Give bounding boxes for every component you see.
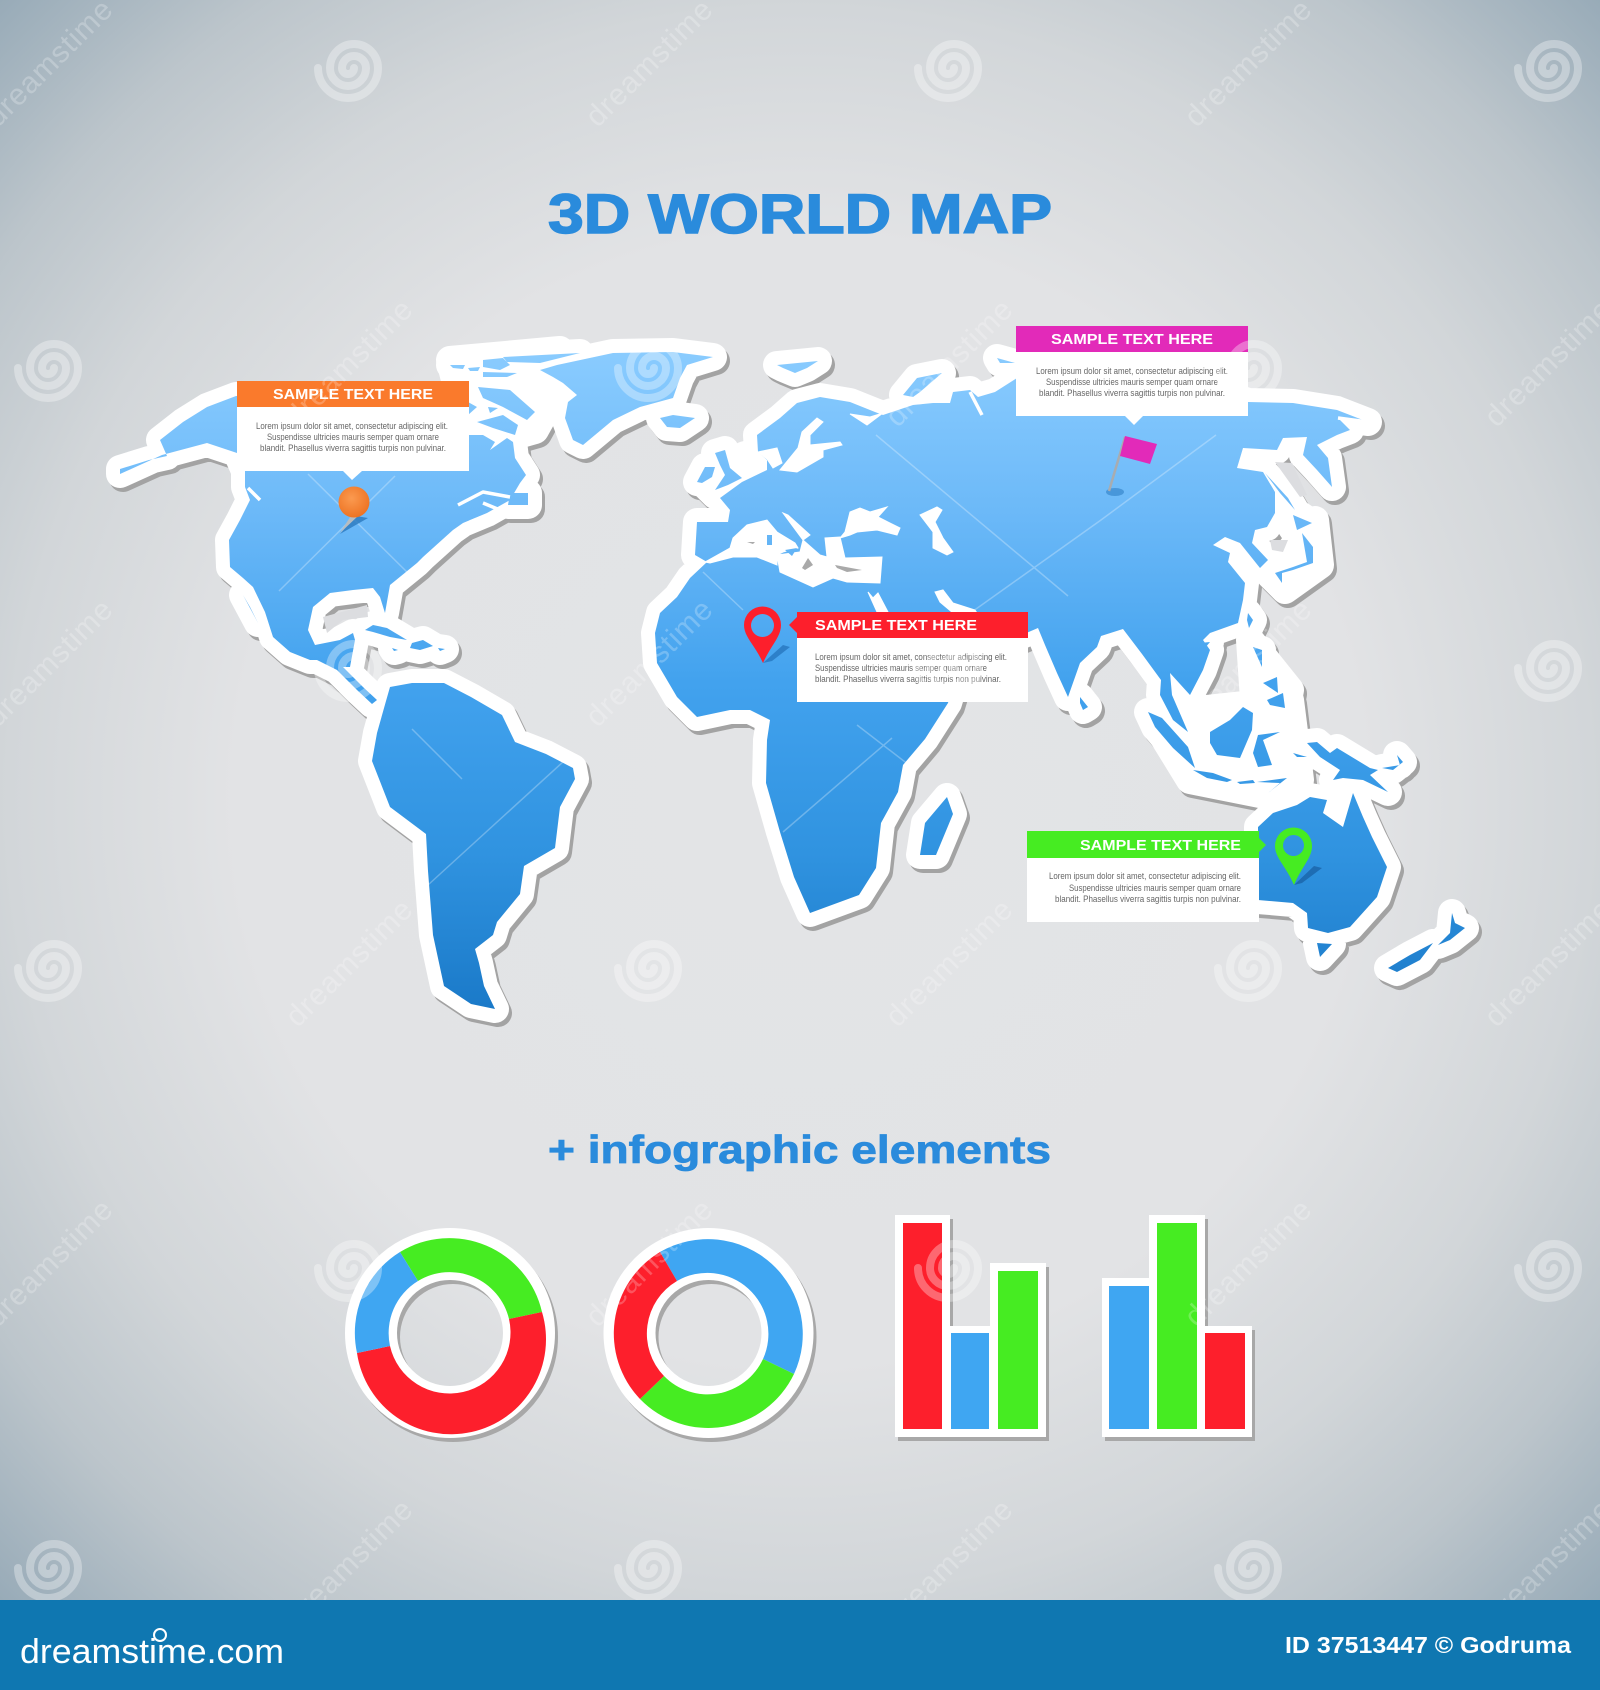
callout: red: Suspendisse ultricies mauris semper quam ornare [815,663,987,674]
callout: orange: SAMPLE TEXT HERE [273,386,433,403]
title: 3D WORLD MAP [548,182,1052,245]
callout: green: Suspendisse ultricies mauris semper quam ornare [1069,883,1241,894]
callout: magenta: Lorem ipsum dolor sit amet, consectetur adipiscing elit. [1036,366,1228,377]
watermark layer: dreamstime [579,593,719,733]
icon: green map pin [1275,828,1322,885]
watermark layer: dreamstime [1178,593,1318,733]
donut chart 2 [614,1239,803,1428]
bar chart 2 [1102,1215,1255,1441]
callout: red: blandit. Phasellus viverra sagittis turpis non pulvinar. [815,674,1001,685]
watermark layer: dreamstime [579,1193,719,1333]
callout: magenta [1016,326,1248,425]
donut chart 1 [355,1238,546,1434]
watermark layer: dreamstime [879,1493,1019,1633]
callout: orange [237,381,469,480]
callout: red [789,612,1028,702]
callout: green [1027,831,1266,922]
watermark layer: dreamstime [279,1493,419,1633]
icon: magenta flag [1106,436,1157,496]
callout: orange: Lorem ipsum dolor sit amet, consectetur adipiscing elit. [256,421,448,432]
callout: green: Lorem ipsum dolor sit amet, consectetur adipiscing elit. [1049,871,1241,882]
callout: magenta: SAMPLE TEXT HERE [1051,331,1213,348]
callout: orange: Suspendisse ultricies mauris semper quam ornare [267,432,439,443]
callout: green: blandit. Phasellus viverra sagittis turpis non pulvinar. [1055,894,1241,905]
image credit: ID 37513447 © Godruma [1285,1632,1571,1658]
icon: orange push pin [338,486,370,534]
subtitle: + infographic elements [548,1129,1051,1172]
callout: magenta: Suspendisse ultricies mauris semper quam ornare [1046,377,1218,388]
callout: magenta: blandit. Phasellus viverra sagittis turpis non pulvinar. [1039,388,1225,399]
callout: orange: blandit. Phasellus viverra sagittis turpis non pulvinar. [260,443,446,454]
watermark layer: dreamstime [879,293,1019,433]
icon: red map pin [744,606,790,663]
callout: red: SAMPLE TEXT HERE [815,617,977,634]
callout: red: Lorem ipsum dolor sit amet, consectetur adipiscing elit. [815,652,1007,663]
callout: green: SAMPLE TEXT HERE [1080,837,1241,854]
watermark layer: dreamstime [279,293,419,433]
footer logo: dreamstime.com [20,1633,284,1671]
watermark layer: dreamstime [279,893,419,1033]
watermark layer: dreamstime [1178,1193,1318,1333]
watermark layer: dreamstime [879,893,1019,1033]
world map [120,350,1468,1013]
footer bar [0,1600,1600,1690]
bar chart 1 [895,1215,1049,1441]
